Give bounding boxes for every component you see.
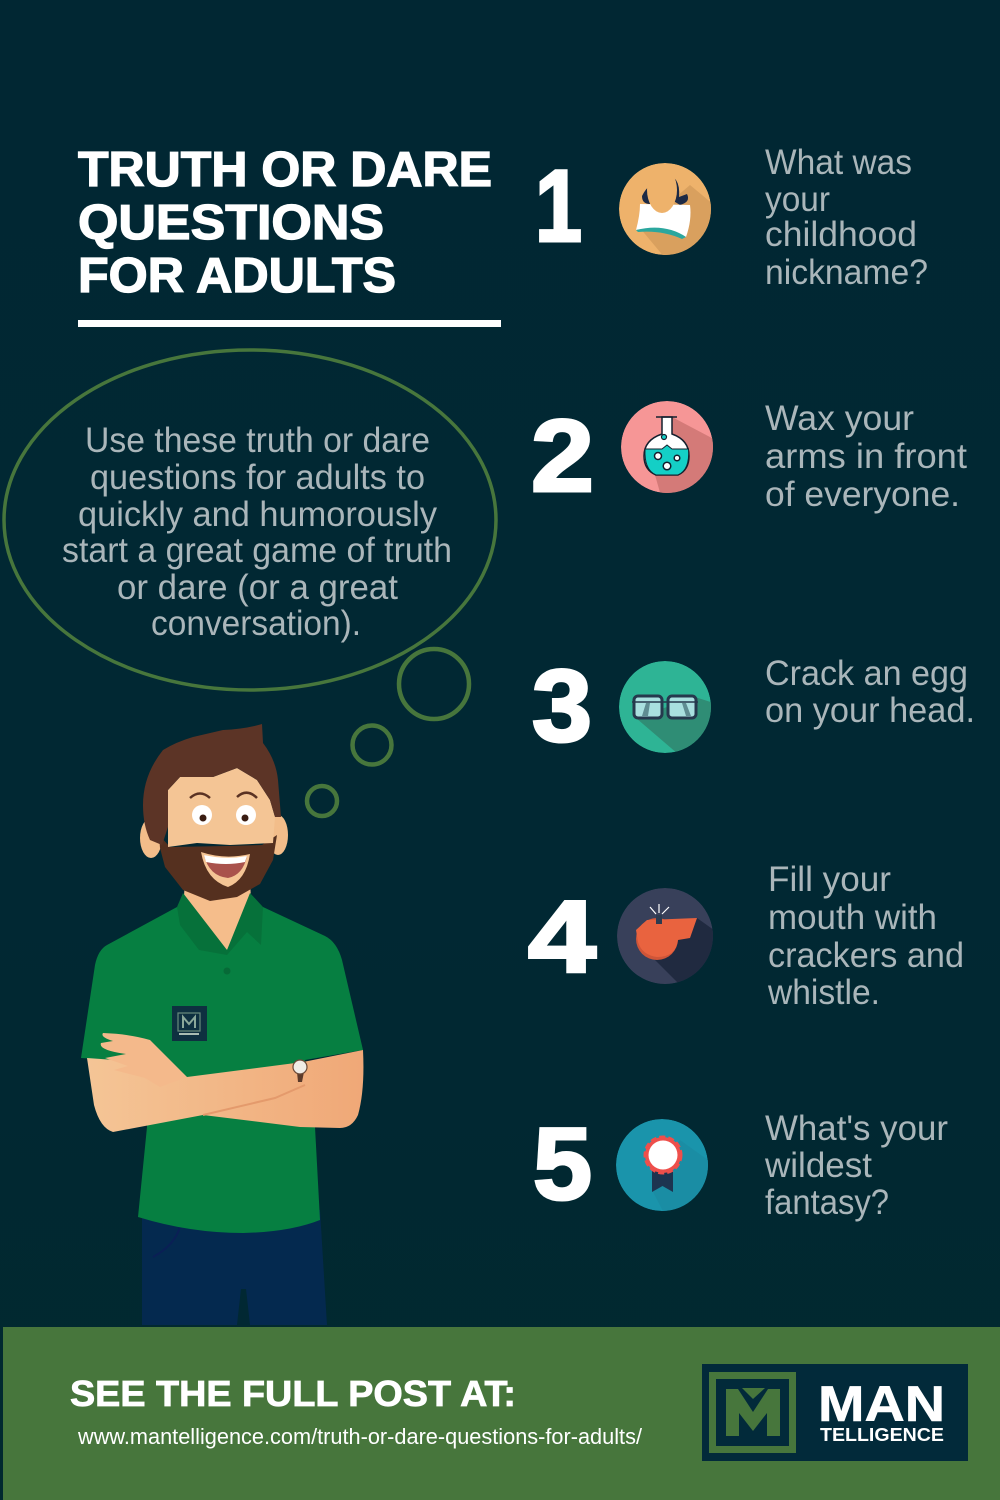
- text: question 2: Wax your: [765, 399, 914, 438]
- trousers: [142, 1210, 327, 1325]
- text: question 2: [765, 399, 967, 514]
- bubble text: [62, 421, 452, 643]
- text: question 4: [767, 860, 964, 1012]
- text: question 1: What was: [765, 143, 912, 182]
- text: question 5: [764, 1109, 948, 1222]
- footer band: [3, 1327, 1000, 1500]
- icon: flask: [621, 401, 713, 493]
- text: question 2: of everyone.: [765, 475, 960, 514]
- bubble text: conversation).: [151, 604, 361, 643]
- number 1: 1: [535, 149, 582, 263]
- crossed arms: [87, 1033, 363, 1132]
- icon: book and reader: [619, 163, 711, 255]
- bubble text: Use these truth or dare: [85, 421, 430, 460]
- neck: [183, 880, 252, 952]
- text: question 3: on your head.: [765, 691, 975, 730]
- wristwatch: [293, 1060, 307, 1082]
- face: [168, 768, 275, 847]
- logo: Mantelligence: [702, 1364, 968, 1461]
- footer url: www.mantelligence.com/truth-or-dare-questions-for-adults/: [77, 1424, 643, 1449]
- text: question 3: Crack an egg: [765, 654, 968, 693]
- text: question 2: arms in front: [765, 437, 967, 476]
- icon: award ribbon: [616, 1119, 708, 1211]
- number 2: 2: [531, 399, 594, 513]
- title: [78, 143, 492, 303]
- text: question 3: [765, 654, 975, 730]
- text: question 1: nickname?: [765, 253, 928, 292]
- logo: Mantelligence: MAN: [818, 1376, 945, 1432]
- number 4: 4: [528, 880, 596, 994]
- title: QUESTIONS: [78, 196, 384, 250]
- thought bubble: [4, 350, 496, 816]
- text: question 1: childhood: [765, 215, 917, 254]
- number 3: 3: [532, 649, 592, 763]
- icon: glasses: [619, 661, 711, 753]
- character: man with crossed arms: [81, 724, 363, 1325]
- title: FOR ADULTS: [78, 249, 396, 303]
- text: question 1: your: [765, 180, 830, 219]
- hair: [143, 724, 281, 845]
- ears: [140, 815, 288, 858]
- footer heading: SEE THE FULL POST AT:: [70, 1373, 516, 1414]
- bubble text: start a great game of truth: [62, 531, 452, 570]
- text: question 5: fantasy?: [765, 1183, 889, 1222]
- bubble text: or dare (or a great: [117, 568, 398, 607]
- text: question 5: What's your: [765, 1109, 948, 1148]
- shirt: [81, 893, 363, 1233]
- icon: whistle: [617, 888, 713, 984]
- title: TRUTH OR DARE: [78, 143, 492, 197]
- number 5: 5: [533, 1107, 592, 1221]
- text: question 4: whistle.: [767, 973, 880, 1012]
- logo: Mantelligence: TELLIGENCE: [820, 1425, 944, 1445]
- text: question 4: Fill your: [768, 860, 891, 899]
- text: question 4: crackers and: [768, 936, 964, 975]
- mouth: [201, 852, 250, 887]
- bubble text: quickly and humorously: [78, 495, 437, 534]
- text: question 4: mouth with: [768, 898, 937, 937]
- eyes: [190, 793, 257, 825]
- text: question 5: wildest: [764, 1146, 872, 1185]
- beard: [159, 835, 277, 901]
- bubble text: questions for adults to: [90, 458, 425, 497]
- shirt badge: [172, 1006, 207, 1041]
- text: question 1: [765, 143, 928, 292]
